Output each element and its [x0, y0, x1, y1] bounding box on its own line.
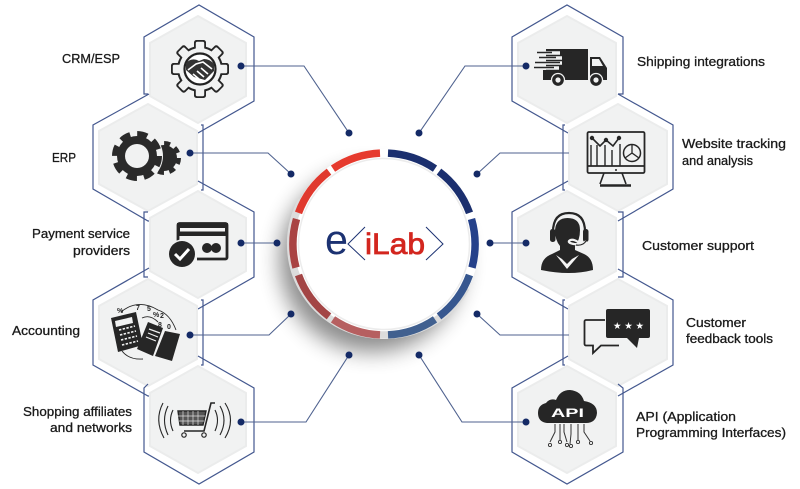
central circle shadow: [280, 168, 464, 352]
label: Shopping affiliates and networks: Shopping affiliates: [23, 404, 133, 419]
icon: shopping cart with signal waves: [159, 403, 230, 438]
connector: API: [416, 352, 530, 426]
label: Payment service providers: Payment service: [32, 226, 130, 241]
label: Payment service providers: [32, 226, 131, 258]
icon: feedback chat bubbles: ★★★: [613, 321, 644, 332]
hexagon: API: [512, 356, 623, 484]
central hub: [289, 149, 479, 339]
hexagon: Website tracking: [563, 94, 673, 221]
hexagon: Customer support: [512, 181, 623, 309]
label: Website tracking and analysis: and analysis: [682, 153, 753, 168]
label: Accounting: Accounting: [12, 323, 80, 338]
icon: monitor with charts: [587, 132, 645, 186]
connector: Feedback: [474, 310, 569, 335]
label: Shopping affiliates and networks: [23, 404, 133, 435]
hexagon: CRM/ESP: [144, 5, 254, 133]
icon: calculator and book: 5: [147, 306, 151, 313]
hexagon: Customer feedback: [563, 269, 673, 396]
label: API: [636, 409, 786, 440]
label: Shipping integrations: Shipping integrations: [637, 54, 766, 69]
label: API: Programming Interfaces): [636, 425, 786, 440]
label: Customer support: Customer support: [642, 238, 754, 253]
label: Customer feedback tools: Customer: [686, 315, 747, 330]
hexagon: Shopping affiliates: [144, 356, 254, 484]
label: Customer feedback tools: [686, 315, 774, 346]
icon: calculator and book: 7: [136, 305, 140, 312]
label: Website tracking and analysis: [682, 136, 786, 168]
logo: eiLab: iLab: [365, 228, 425, 261]
icon: calculator and book: 0: [167, 324, 171, 331]
connector: Accounting: [186, 310, 294, 338]
connector: Payment: [238, 240, 280, 246]
connector: Support: [486, 240, 530, 246]
logo: eiLab: e: [325, 216, 348, 263]
hexagon: Payment service providers: [144, 181, 254, 309]
logo: eiLab: [325, 216, 443, 263]
icon: calculator and book: [111, 304, 180, 361]
label: Shopping affiliates and networks: and networks: [50, 420, 133, 435]
icon: delivery truck: [534, 49, 607, 86]
icon: calculator and book: %: [117, 308, 124, 315]
icon: API cloud: API: [551, 406, 584, 420]
icon: calculator and book: 2: [160, 313, 164, 320]
hexagon: Accounting: [93, 268, 203, 396]
ring: red segments: [293, 153, 380, 335]
icon: feedback chat bubbles: [584, 309, 650, 353]
icon: headset agent: [541, 213, 593, 273]
label: Payment service providers: providers: [73, 243, 131, 258]
hexagon: Shipping: [512, 5, 623, 133]
label: CRM/ESP: CRM/ESP: [62, 51, 120, 66]
icon: gear with handshake: [171, 40, 229, 98]
icon: calculator and book: 8: [158, 322, 162, 329]
connector: CRM/ESP: [238, 62, 352, 136]
icon: credit card: [168, 223, 228, 268]
label: ERP: ERP: [52, 150, 76, 165]
connector: Shipping: [416, 62, 530, 136]
icon: gears: [111, 130, 178, 182]
connector: Website: [474, 153, 569, 178]
label: API: API (Application: [636, 409, 736, 424]
label: Customer feedback tools: feedback tools: [686, 331, 774, 346]
connector: ERP: [186, 150, 294, 178]
icon: API cloud: [538, 390, 597, 448]
ring: navy segments: [388, 153, 475, 335]
connector: Shopping: [238, 352, 352, 426]
hexagon: ERP: [93, 94, 203, 221]
icon: calculator and book: %: [153, 312, 160, 319]
label: Website tracking and analysis: Website tracking: [682, 136, 786, 151]
